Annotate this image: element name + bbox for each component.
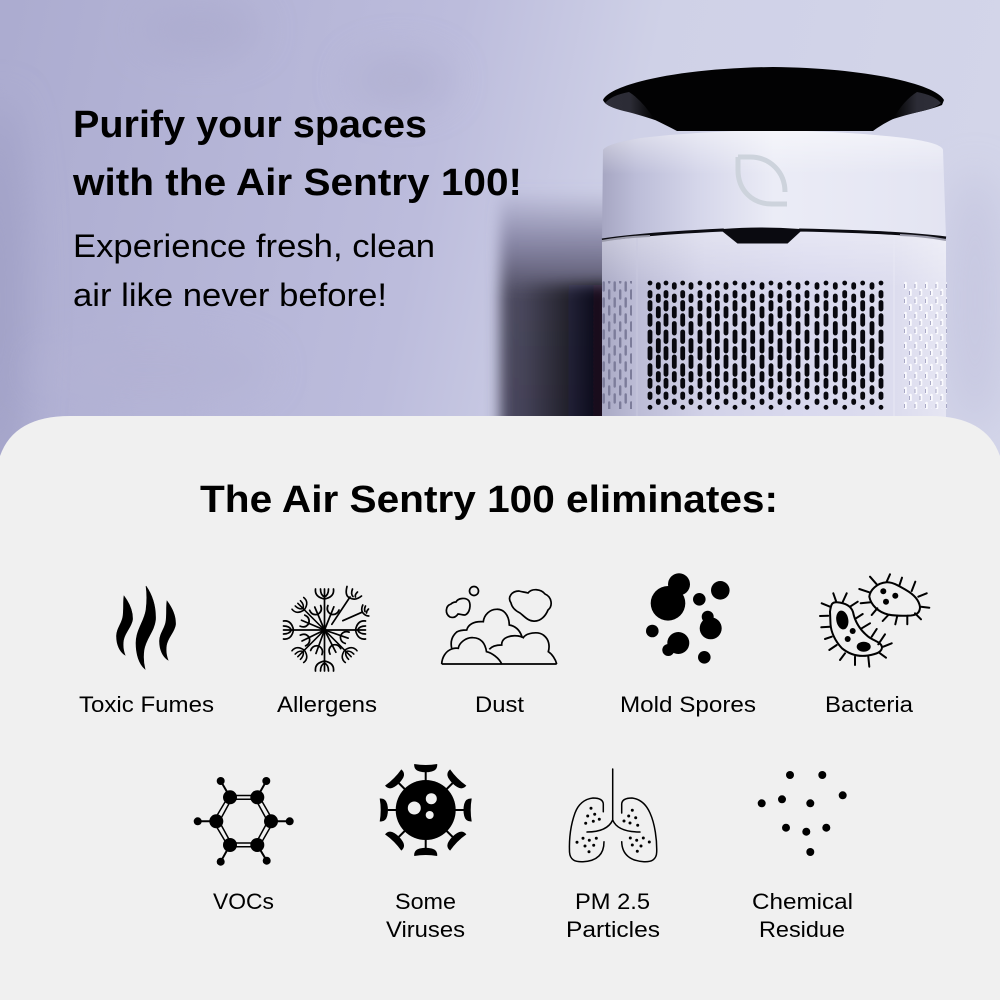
item: bacteria: Bacteria [825, 692, 914, 717]
subheadline [73, 228, 435, 313]
item: chemical residue: Chemical [752, 889, 853, 914]
upper body of purifier [602, 130, 946, 240]
icon: lungs with particles [569, 769, 657, 862]
air purifier device [602, 67, 947, 420]
item: bacteria [820, 574, 929, 717]
item: VOCs [194, 777, 294, 914]
icon: bacteria [820, 574, 929, 667]
item: allergens [277, 586, 377, 717]
item: chemical residue [752, 771, 853, 942]
icon: dandelion [284, 586, 369, 671]
top disc and cone [603, 67, 944, 131]
icon: mold spores [646, 573, 730, 664]
item: PM 2.5 particles: PM 2.5 [575, 889, 650, 914]
item: allergens: Allergens [277, 692, 377, 717]
headline [72, 104, 522, 204]
item: PM 2.5 particles [566, 769, 660, 942]
background photo: lavender wall [0, 0, 1000, 500]
item: chemical residue: Residue [759, 917, 845, 942]
side grille left [602, 281, 632, 409]
item: mold spores: Mold Spores [620, 692, 756, 717]
item: toxic fumes: Toxic Fumes [79, 692, 214, 717]
item: PM 2.5 particles: Particles [566, 917, 660, 942]
headline: Purify your spaces [73, 104, 427, 146]
subheadline: air like never before! [73, 277, 387, 313]
icon: dust clouds [442, 586, 557, 664]
item: some viruses [380, 764, 472, 942]
item: some viruses: Viruses [386, 917, 465, 942]
front grille perforations [650, 283, 881, 407]
item: dust [442, 586, 557, 717]
icon: wavy fumes [116, 586, 176, 669]
icon: virus [380, 764, 472, 856]
item: dust: Dust [475, 692, 525, 717]
headline: with the Air Sentry 100! [72, 162, 522, 204]
side grille right [903, 281, 947, 409]
subheadline: Experience fresh, clean [73, 228, 435, 264]
item: VOCs: VOCs [213, 889, 274, 914]
icon: residue dots [758, 771, 847, 856]
body seam ring with notch [602, 230, 946, 242]
item: toxic fumes [79, 586, 214, 717]
leaf logo [738, 157, 787, 204]
panel: eliminates list [0, 416, 1000, 1000]
item: some viruses: Some [395, 889, 456, 914]
panel heading: The Air Sentry 100 eliminates: [200, 479, 778, 521]
item: mold spores [620, 573, 756, 717]
lower body of purifier [602, 232, 946, 420]
icon: benzene molecule [194, 777, 294, 866]
